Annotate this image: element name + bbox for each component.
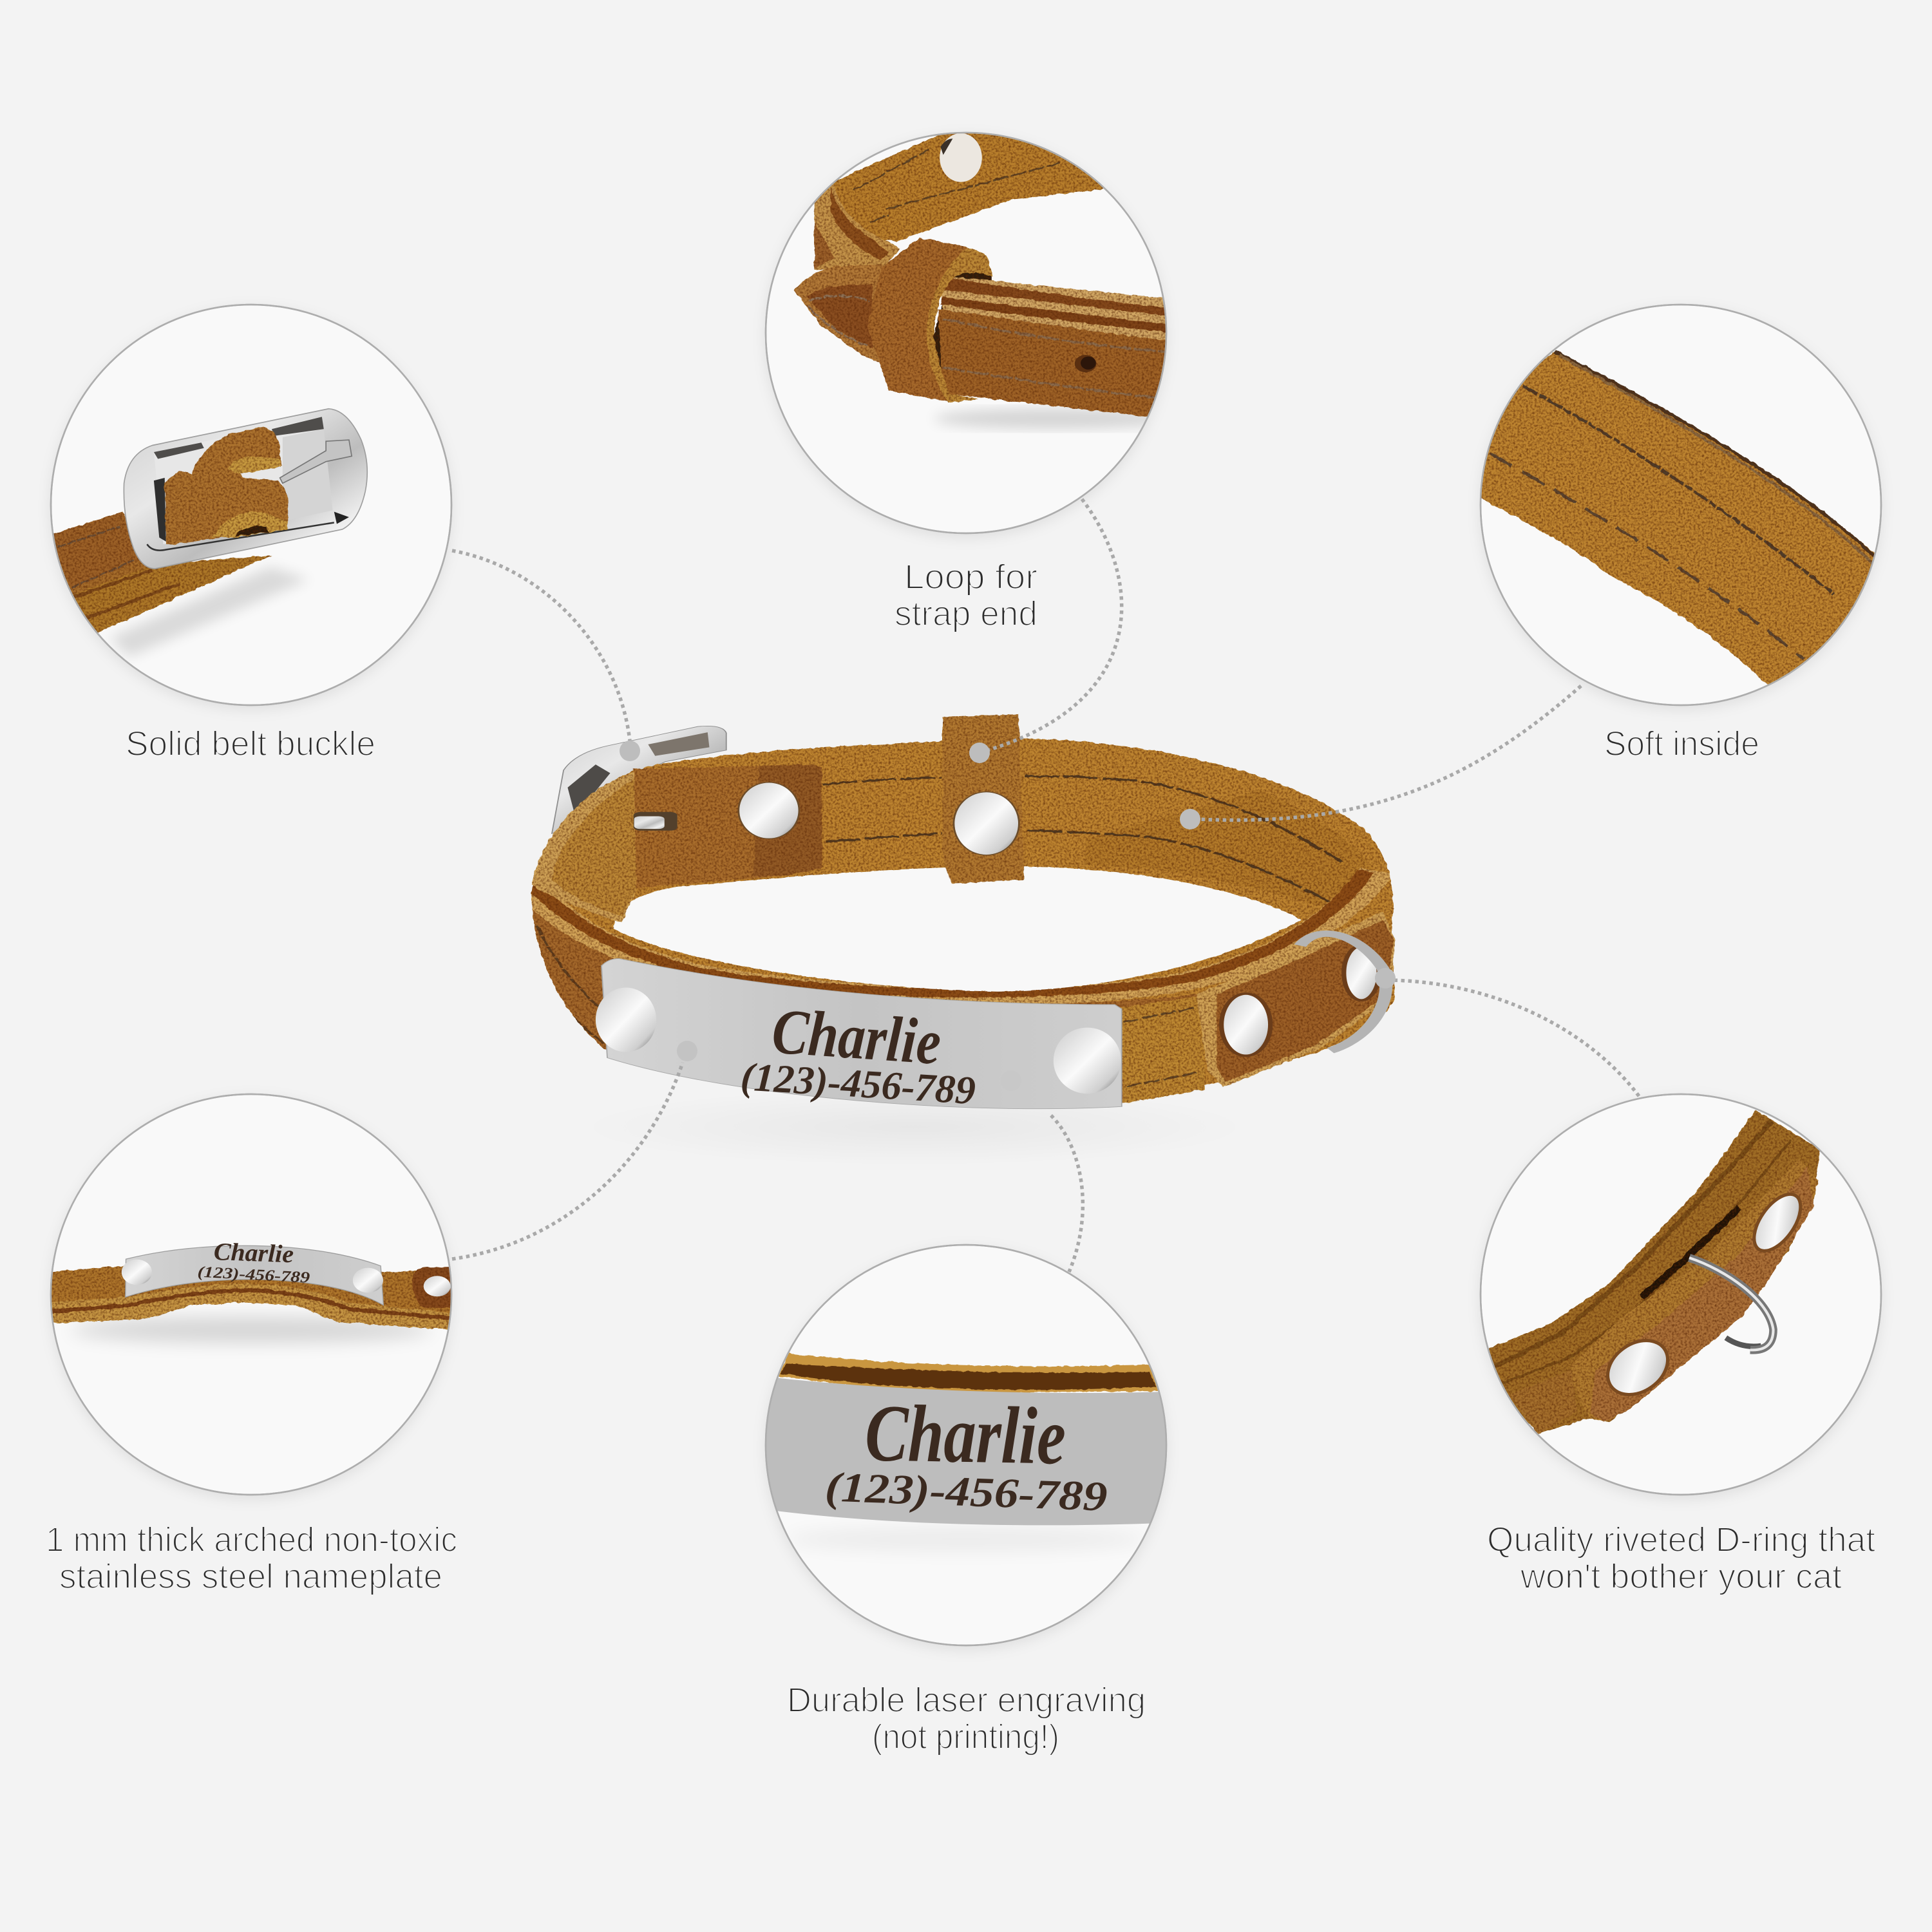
plate close-up photo: (123)-456-789 (824, 1464, 1108, 1520)
plate close-up photo: Charlie (864, 1388, 1066, 1482)
buckle seen behind collar (552, 726, 726, 907)
plate close-up photo (762, 1354, 1177, 1552)
label: engraving (787, 1681, 1146, 1756)
buckle photo (50, 409, 367, 657)
connector: buckle (452, 551, 640, 761)
circle base (51, 305, 451, 705)
label: solid belt buckle: Solid belt buckle (126, 724, 375, 763)
label: engraving: Durable laser engraving (787, 1681, 1146, 1719)
centre gap of collar (613, 866, 1302, 992)
panel: riveted D-ring (1481, 1094, 1881, 1495)
engraved name: Charlie (770, 995, 943, 1078)
loop photo (794, 131, 1179, 429)
label: nameplate: stainless steel nameplate (59, 1557, 442, 1596)
circle outline (51, 1094, 451, 1495)
flat collar photo: (123)-456-789 (197, 1264, 310, 1287)
collar ground shadow (580, 1088, 1249, 1166)
connector: soft inside (1180, 686, 1581, 829)
suede photo (1468, 352, 1891, 687)
circle base (1481, 305, 1881, 705)
connector: D-ring (1375, 968, 1639, 1096)
circle base (51, 1094, 451, 1495)
label: soft inside: Soft inside (1604, 724, 1759, 763)
panel: soft inside (1468, 305, 1891, 705)
panel: arched nameplate (47, 1094, 456, 1495)
connector: loop (969, 499, 1122, 763)
label: D-ring (1487, 1520, 1875, 1596)
label: loop for strap end: strap end (895, 594, 1037, 633)
circle outline (766, 133, 1166, 533)
circle base (766, 1245, 1166, 1645)
D-ring photo (1484, 1110, 1821, 1434)
connector: nameplate (452, 1041, 697, 1259)
circle outline (766, 1245, 1166, 1645)
circle outline (1481, 305, 1881, 705)
plate metal (601, 958, 1122, 1109)
flat collar photo: Charlie (213, 1238, 294, 1268)
plate rivets (596, 988, 1121, 1094)
circle base (1481, 1094, 1881, 1495)
panel: solid belt buckle (50, 305, 451, 705)
label: D-ring: won't bother your cat (1520, 1557, 1842, 1596)
nameplate (596, 958, 1122, 1113)
connector: engraving (1001, 1070, 1083, 1272)
circle outline (1481, 1094, 1881, 1495)
circle base (766, 133, 1166, 533)
strap pieces, tabs and loop (531, 714, 1395, 1103)
flat collar photo (47, 1238, 456, 1343)
engraved phone: (123)-456-789 (739, 1055, 977, 1113)
circle outline (51, 305, 451, 705)
main collar photo (526, 714, 1395, 1166)
label: engraving: (not printing!) (872, 1718, 1059, 1756)
label: loop for strap end (895, 558, 1037, 633)
leather ring back and front (526, 739, 1395, 1103)
panel: laser engraving (762, 1245, 1177, 1645)
label: D-ring: Quality riveted D-ring that (1487, 1520, 1875, 1559)
label: nameplate (46, 1520, 457, 1596)
label: nameplate: 1 mm thick arched non-toxic (46, 1520, 457, 1559)
panel: loop for strap end (766, 131, 1179, 533)
label: loop for strap end: Loop for (904, 558, 1037, 596)
pin slot, rivets and D-ring (634, 782, 1386, 1056)
